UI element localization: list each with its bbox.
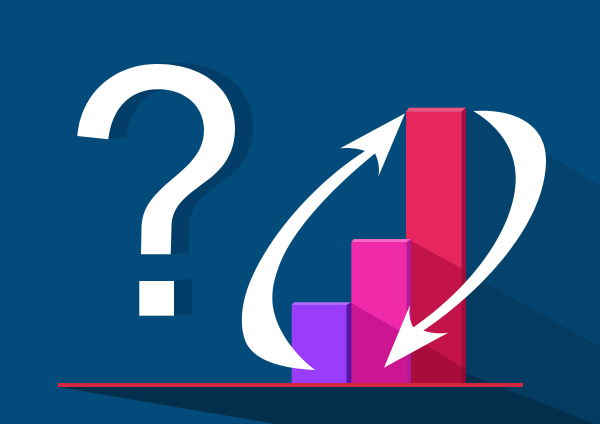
bar chart (292, 108, 466, 383)
bar: pink (351, 239, 411, 383)
question mark shadow (80, 63, 253, 316)
long shadow: red bar (466, 108, 600, 424)
question mark (77, 64, 235, 316)
long shadow: under ground line (58, 373, 600, 424)
ground line (58, 383, 523, 387)
bar: purple (292, 302, 351, 383)
arrow: upward left (242, 113, 405, 370)
bar: red (406, 108, 466, 383)
arrows (242, 111, 546, 370)
arrow: downward right (384, 111, 546, 368)
long shadow: pink bar (466, 272, 600, 424)
